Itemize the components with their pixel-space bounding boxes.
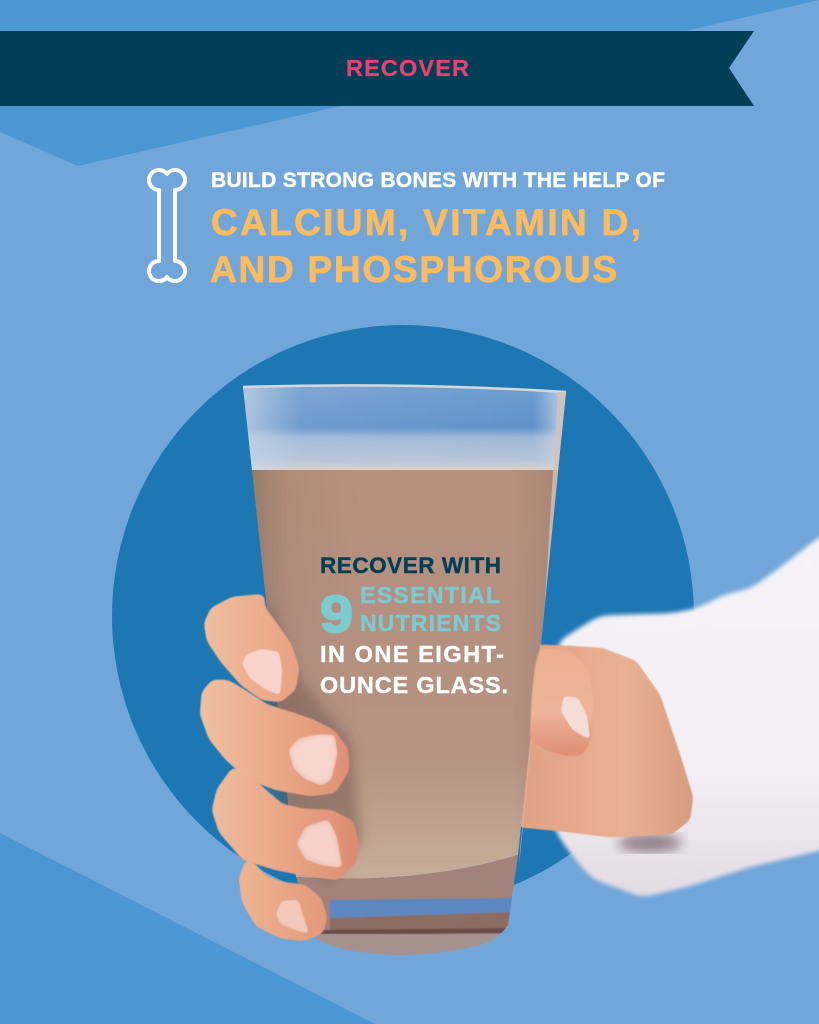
glass base xyxy=(296,855,518,955)
glass right edge xyxy=(519,392,566,866)
finger shadow xyxy=(262,600,362,880)
photo: sleeve xyxy=(552,528,819,897)
finger one nail xyxy=(242,649,282,695)
label line five: OUNCE GLASS. xyxy=(320,672,508,698)
circle xyxy=(112,325,694,907)
rim highlight xyxy=(243,385,566,392)
label line four: IN ONE EIGHT- xyxy=(320,641,504,667)
finger two nail xyxy=(289,735,337,785)
photo: thumb xyxy=(530,648,593,756)
label number 9: 9 xyxy=(320,586,353,644)
finger four xyxy=(239,858,327,941)
heading line: nutrients two: AND PHOSPHOROUS xyxy=(210,249,617,290)
thumb nail xyxy=(561,696,590,740)
glass rim xyxy=(243,385,566,470)
finger one xyxy=(204,594,299,702)
label line two: ESSENTIAL xyxy=(360,582,500,608)
finger four nail xyxy=(276,900,309,934)
top background shape xyxy=(0,0,819,166)
finger three xyxy=(212,768,359,880)
photo: fingers xyxy=(200,594,359,941)
milk surface xyxy=(252,466,558,472)
photo: glass xyxy=(243,385,566,965)
label line one: RECOVER WITH xyxy=(320,553,501,578)
glass label xyxy=(320,553,508,698)
finger three nail xyxy=(297,820,342,867)
heading xyxy=(210,169,665,290)
heading line: nutrients one: CALCIUM, VITAMIN D, xyxy=(211,202,641,243)
banner xyxy=(0,31,754,106)
photo: wrist and palm xyxy=(518,645,693,852)
icon: bone xyxy=(149,170,185,281)
banner title: RECOVER xyxy=(346,55,469,81)
sleeve shadow xyxy=(618,834,682,852)
finger two xyxy=(200,680,349,796)
label line three: NUTRIENTS xyxy=(360,610,501,636)
heading line: intro: BUILD STRONG BONES WITH THE HELP OF xyxy=(211,169,665,192)
milk xyxy=(252,470,558,879)
bottom background shape xyxy=(0,833,375,1024)
